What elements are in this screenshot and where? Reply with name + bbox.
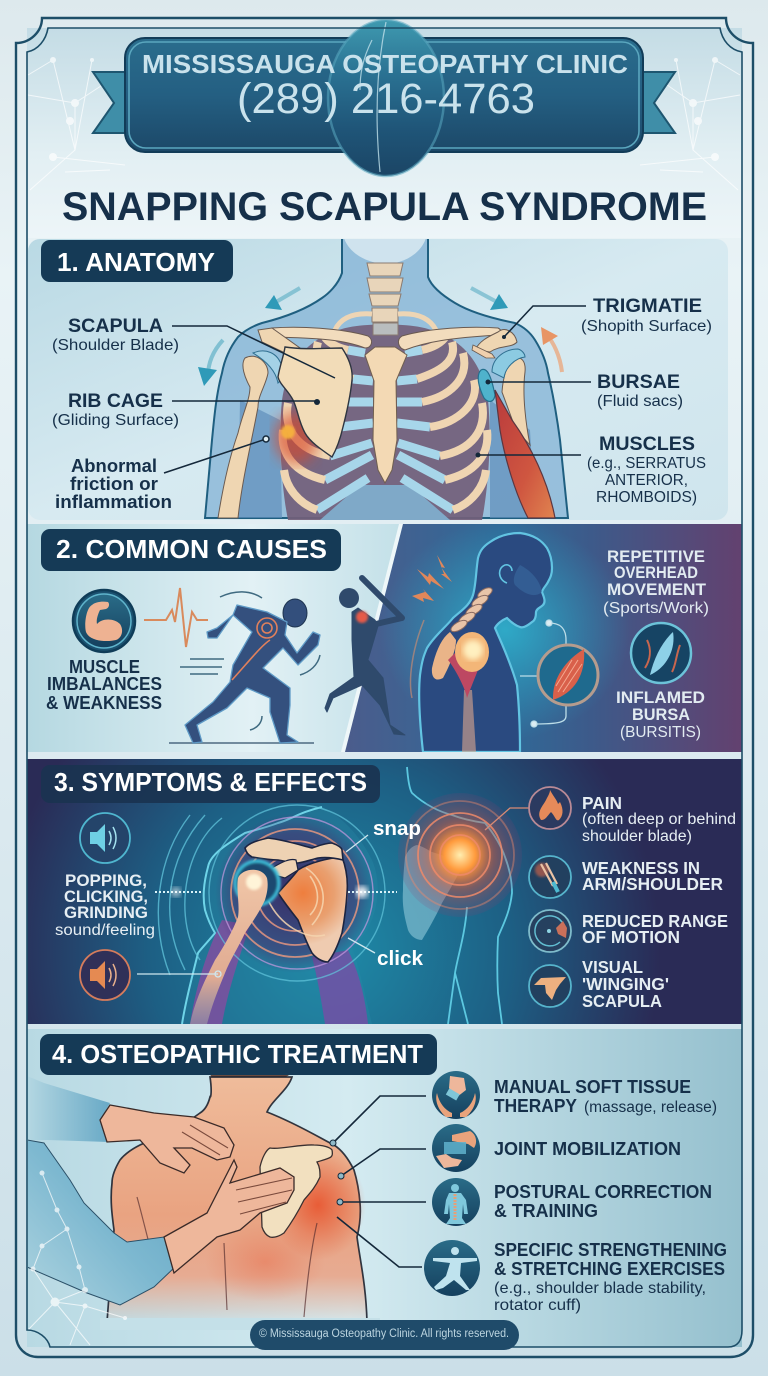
sound arcs left — [158, 815, 222, 975]
causes divider — [341, 524, 403, 752]
therapist lower hand — [164, 1160, 294, 1273]
chin shape — [344, 239, 426, 262]
connector lines — [330, 1096, 426, 1267]
treatment background — [27, 1029, 742, 1347]
patient hair — [209, 1072, 292, 1088]
coracoid — [272, 859, 298, 878]
causes light side — [27, 524, 402, 752]
acromion left — [258, 328, 300, 353]
icon: flexed arm — [73, 590, 135, 652]
bursa — [478, 369, 495, 401]
icon: strengthening exercise — [424, 1240, 480, 1296]
phone number: (289) 216-4763 — [237, 75, 535, 123]
icon: winging scapula — [529, 965, 571, 1007]
repetitive overhead label: (Sports/Work) — [603, 600, 709, 617]
shoulder body fill — [182, 807, 378, 1024]
symptoms background — [27, 759, 742, 1024]
popping label: POPPING, — [65, 871, 147, 890]
runner silhouette — [185, 605, 320, 743]
footer copyright pill: © Mississauga Osteopathy Clinic. All rights reserved. — [259, 1328, 509, 1340]
section heading: anatomy: 1. ANATOMY — [57, 247, 215, 277]
repetitive overhead label: OVERHEAD — [614, 563, 698, 582]
back creases — [137, 1197, 317, 1317]
banner inner line — [129, 42, 639, 148]
treatment labels: POSTURAL CORRECTION — [494, 1182, 712, 1202]
treatment labels: SPECIFIC STRENGTHENING — [494, 1240, 727, 1260]
icon: sound orange — [80, 950, 130, 1000]
finger lines — [182, 1125, 292, 1214]
treatment labels: (massage, release) — [584, 1099, 717, 1116]
popping label: CLICKING, — [64, 887, 148, 906]
banner oval medallion — [328, 20, 444, 176]
right joint cap — [492, 349, 525, 378]
cover bottom outline — [100, 1318, 380, 1330]
treatment labels: & STRETCHING EXERCISES — [494, 1259, 725, 1279]
overhead throw figure — [325, 578, 405, 735]
upper arm shaft — [462, 690, 476, 752]
labels right: RHOMBOIDS) — [596, 489, 697, 506]
symptom labels: VISUAL — [582, 957, 643, 977]
symptoms glow — [27, 759, 742, 1024]
thrower raised arm — [362, 578, 402, 624]
icon: sound teal — [80, 813, 130, 863]
friction red area — [274, 412, 318, 464]
armpit dark regions — [238, 400, 535, 518]
popping label — [55, 871, 155, 939]
thrower shoulder spot — [356, 611, 368, 623]
ribs right — [397, 336, 487, 510]
labels right: (e.g., SERRATUS — [587, 455, 706, 472]
right humerus — [502, 358, 530, 445]
section heading: treatment — [40, 1034, 437, 1075]
inflamed bursa label: (BURSITIS) — [620, 724, 701, 741]
inflamed bursa label: BURSA — [632, 705, 690, 724]
repetitive overhead label: REPETITIVE — [607, 547, 705, 566]
body outline right — [407, 767, 512, 1024]
labels left: (Gliding Surface) — [52, 412, 179, 429]
symptom labels: PAIN — [582, 793, 622, 813]
symptom labels: ARM/SHOULDER — [582, 874, 723, 894]
muscle imbalance label: & WEAKNESS — [46, 693, 162, 713]
labels left: SCAPULA — [68, 315, 163, 337]
pain rings — [406, 801, 514, 909]
scapula — [278, 857, 347, 962]
network pattern: header — [28, 57, 740, 190]
icon: pain flame — [529, 787, 571, 829]
muscle imbalance label: MUSCLE — [69, 657, 140, 677]
humeral head highlight — [246, 874, 262, 890]
symptom labels: (often deep or behind — [582, 811, 736, 828]
sound sparkle left — [155, 887, 202, 897]
purple muscle left — [190, 920, 250, 1024]
sound and pain connectors — [137, 808, 529, 977]
treatment labels: THERAPY — [494, 1096, 577, 1116]
inflammation glow — [270, 1150, 366, 1260]
sound sparkle right — [348, 886, 397, 898]
muscle imbalance label — [46, 657, 162, 713]
left joint cap — [253, 351, 282, 383]
repetitive overhead label — [603, 547, 709, 617]
lightning bolts — [412, 555, 452, 602]
symptom labels: WEAKNESS IN — [582, 858, 700, 878]
shoulder glow — [463, 640, 483, 660]
body outline left — [182, 807, 322, 1024]
purple muscle right — [312, 950, 368, 1024]
shoulder bones — [432, 632, 456, 680]
icon: manual therapy — [432, 1071, 480, 1119]
ground line — [169, 742, 314, 744]
symptom labels — [582, 793, 736, 1011]
footer copyright pill — [250, 1320, 519, 1350]
scapula bone — [278, 347, 352, 457]
network pattern — [28, 1170, 127, 1345]
icon: range of motion — [529, 910, 571, 952]
therapist upper sleeve — [27, 1076, 110, 1142]
ECG pulse — [144, 588, 208, 647]
symptom labels: SCAPULA — [582, 991, 662, 1011]
lower back warm patch — [205, 1222, 325, 1302]
oval crack — [360, 22, 386, 172]
anatomy background — [28, 239, 728, 520]
leader lines — [164, 306, 591, 473]
header background — [27, 28, 742, 238]
acromion right — [475, 330, 517, 352]
right figure scapula — [403, 845, 465, 940]
causes dark side — [343, 524, 742, 752]
muscle callout connectors — [520, 620, 566, 727]
pain glow — [398, 793, 522, 917]
labels left: inflammation — [55, 492, 172, 512]
inflamed bursa label: INFLAMED — [616, 688, 705, 707]
panel: 1 anatomy — [28, 238, 728, 520]
ribs left — [283, 336, 373, 510]
labels right: (Shopith Surface) — [581, 318, 712, 335]
section heading: anatomy — [41, 240, 233, 282]
snap label: snap — [373, 818, 421, 840]
section heading: symptoms: 3. SYMPTOMS & EFFECTS — [54, 767, 367, 797]
motion lines — [180, 592, 320, 730]
collarbones — [269, 327, 501, 350]
labels left: Abnormal — [71, 456, 157, 476]
repetitive overhead label: MOVEMENT — [607, 580, 707, 599]
scapula — [260, 1145, 332, 1237]
blue glow — [396, 536, 616, 724]
banner ribbon right — [641, 72, 675, 133]
section heading: causes — [41, 529, 341, 571]
panel: 4 osteopathic treatment — [27, 1029, 742, 1347]
spine — [367, 263, 403, 335]
treatment labels: JOINT MOBILIZATION — [494, 1139, 681, 1159]
panel: 2 common causes — [27, 520, 742, 752]
acromion — [245, 838, 343, 863]
humeral head — [455, 632, 489, 672]
click label: click — [377, 948, 424, 970]
lower abdomen blue — [320, 485, 450, 520]
motion arc — [410, 620, 424, 698]
therapist lower sleeve — [27, 1140, 175, 1305]
motion arrows — [198, 288, 562, 386]
patient back — [107, 1077, 367, 1322]
spine segments — [449, 586, 494, 634]
muscle fiber icon — [538, 645, 598, 705]
banner ribbon left — [93, 72, 127, 133]
labels left: friction or — [70, 474, 158, 494]
thrower body — [325, 608, 405, 735]
humerus — [190, 870, 268, 1024]
profile figure — [419, 533, 552, 752]
banner plate — [125, 38, 643, 152]
runner head — [283, 599, 307, 627]
friction spark — [281, 425, 295, 439]
main title: SNAPPING SCAPULA SYNDROME — [62, 185, 707, 229]
ribcage back — [280, 325, 490, 520]
section heading: causes: 2. COMMON CAUSES — [56, 534, 327, 564]
labels left: (Shoulder Blade) — [52, 337, 179, 354]
symptom labels: OF MOTION — [582, 927, 680, 947]
treatment labels: rotator cuff) — [494, 1297, 581, 1314]
panel: 3 symptoms and effects — [27, 759, 742, 1024]
symptoms illustration — [158, 767, 522, 1024]
ear — [500, 565, 512, 583]
popping label: GRINDING — [64, 903, 148, 922]
labels right: ANTERIOR, — [605, 472, 688, 489]
symptom labels: 'WINGING' — [582, 974, 669, 994]
inflamed bursa label — [616, 688, 705, 741]
causes dark side illustration — [396, 532, 616, 752]
treatment labels — [494, 1077, 727, 1314]
torso silhouette — [205, 238, 568, 518]
first rib arches — [335, 314, 436, 330]
treatment labels: MANUAL SOFT TISSUE — [494, 1077, 691, 1097]
joint ring — [235, 861, 279, 905]
concentric rings — [231, 829, 359, 957]
section heading: treatment: 4. OSTEOPATHIC TREATMENT — [52, 1039, 423, 1069]
labels right: BURSAE — [597, 371, 680, 393]
runner pain rings — [232, 618, 277, 680]
running figure — [169, 592, 320, 743]
dark shoulder blob — [215, 813, 375, 973]
anatomy illustration — [205, 238, 568, 520]
labels right: MUSCLES — [599, 433, 695, 455]
icon: arm weakness — [529, 856, 571, 898]
labels left: RIB CAGE — [68, 390, 163, 412]
popping label: sound/feeling — [55, 922, 155, 939]
shoulder muscle — [448, 648, 478, 698]
labels right: TRIGMATIE — [593, 296, 702, 317]
labels right — [581, 296, 712, 506]
treatment labels: & TRAINING — [494, 1201, 598, 1221]
treatment labels: (e.g., shoulder blade stability, — [494, 1280, 706, 1297]
treatment illustration — [27, 1072, 380, 1345]
clinic name: MISSISSAUGA OSTEOPATHY CLINIC — [142, 51, 628, 79]
symptom labels: REDUCED RANGE — [582, 911, 728, 931]
left humerus — [218, 356, 268, 518]
clinic banner — [93, 20, 675, 176]
muscle imbalance label: IMBALANCES — [47, 674, 162, 694]
symptom labels: shoulder blade) — [582, 828, 692, 845]
icon: inflamed bursa — [631, 623, 691, 683]
thrower head — [339, 588, 359, 608]
sternum — [365, 347, 407, 483]
scapula inner rings — [268, 868, 325, 936]
labels right: (Fluid sacs) — [597, 393, 683, 410]
coracoid — [472, 345, 495, 358]
serratus muscle — [495, 390, 555, 518]
therapist top hand — [100, 1105, 234, 1173]
labels left — [52, 315, 179, 512]
face shading — [514, 565, 542, 595]
icon: joint mobilization — [432, 1124, 480, 1172]
outer rings — [209, 805, 385, 981]
icon: postural correction — [432, 1178, 480, 1226]
